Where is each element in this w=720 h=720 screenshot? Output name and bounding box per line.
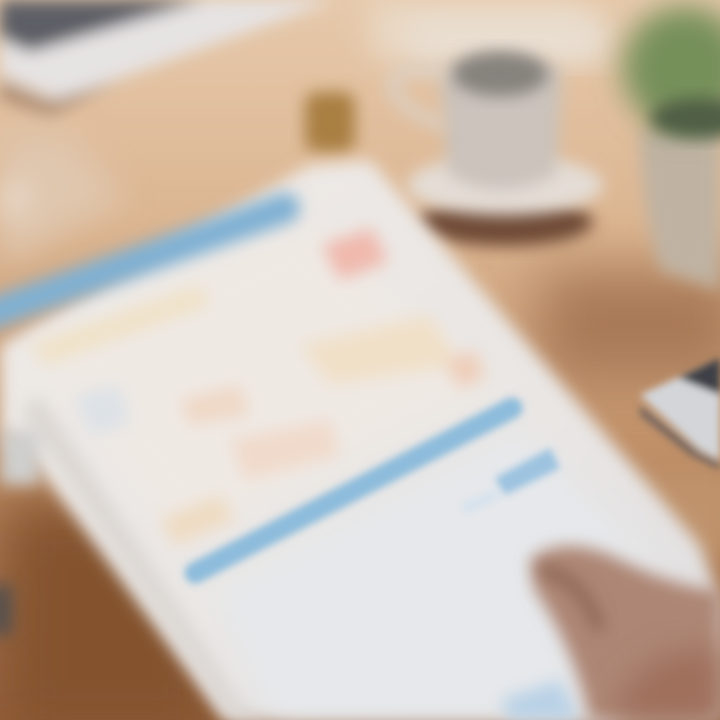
paper fold shadow xyxy=(20,395,270,720)
form upper table xyxy=(40,215,490,545)
top blue band xyxy=(0,208,285,314)
dark left edge object xyxy=(0,430,40,635)
blue footer tint of paper xyxy=(500,680,580,720)
paper form xyxy=(0,160,720,720)
small blue label xyxy=(460,448,560,514)
phone on right edge xyxy=(640,358,720,470)
pastel table cells xyxy=(30,285,485,545)
potted plant xyxy=(623,6,720,290)
coffee cup and saucer xyxy=(392,20,610,246)
hand holding paper xyxy=(530,546,720,720)
pink header block xyxy=(322,228,388,280)
laptop corner xyxy=(0,0,335,118)
middle blue band xyxy=(195,408,512,573)
notebook on left side of desk xyxy=(0,130,125,265)
bottle cap behind paper xyxy=(305,92,355,152)
form lower section xyxy=(215,430,660,720)
